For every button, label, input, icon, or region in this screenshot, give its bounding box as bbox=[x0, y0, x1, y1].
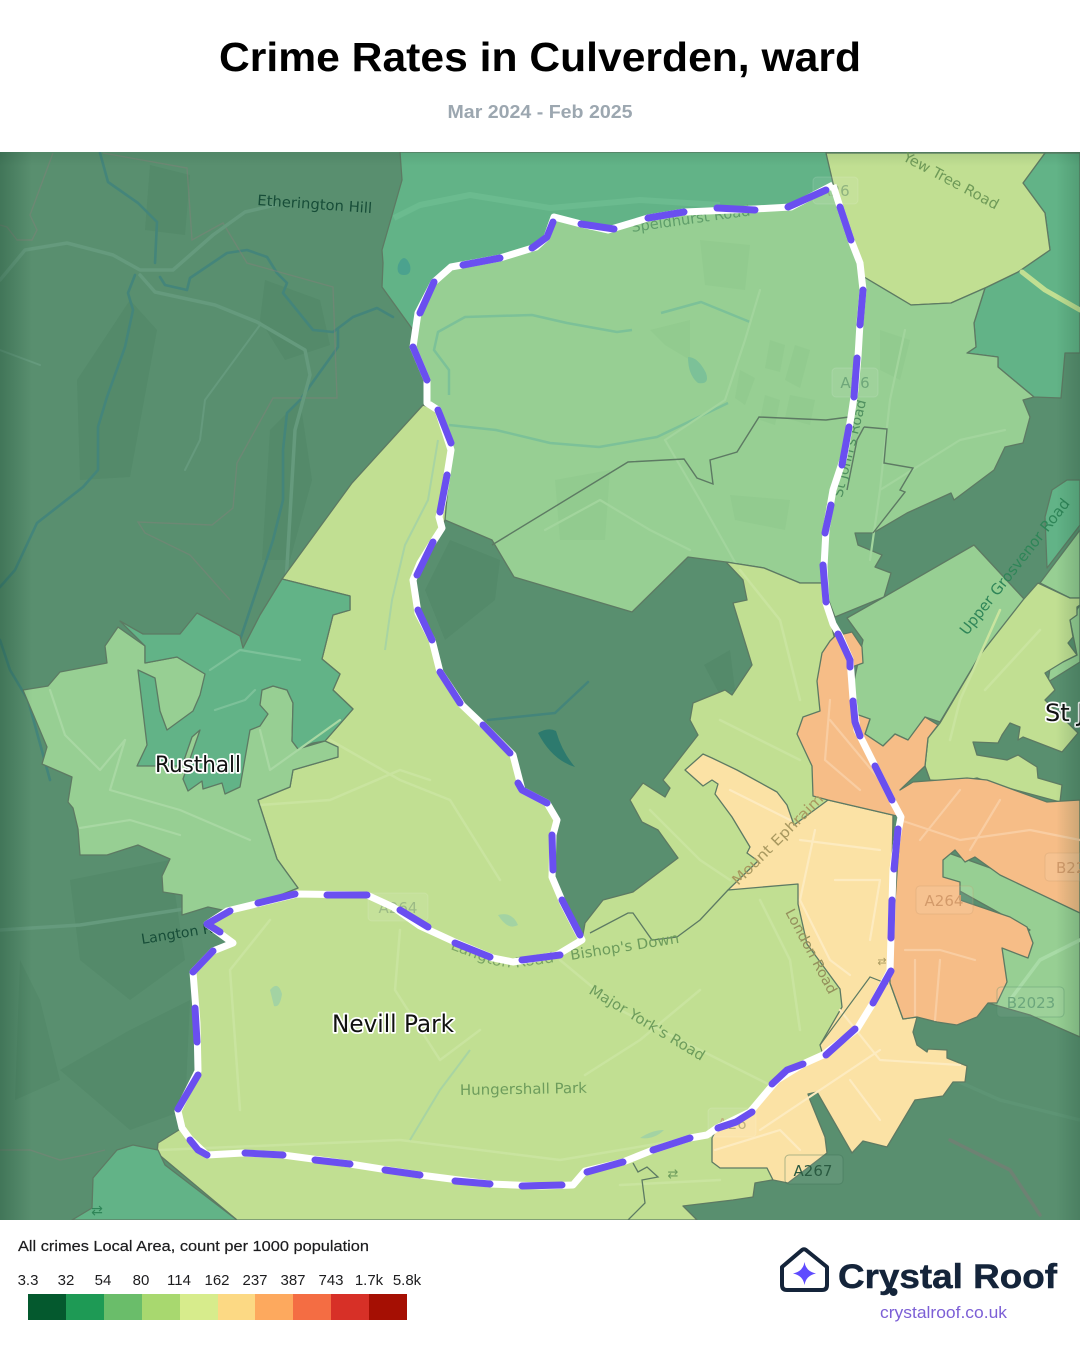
water: pond bbox=[398, 258, 410, 275]
road label: Speldhurst Road: Speldhurst Road bbox=[630, 203, 751, 236]
road label: Major York's Road: Major York's Road bbox=[586, 983, 707, 1064]
logo key detail bbox=[890, 1288, 898, 1296]
legend bbox=[18, 1238, 422, 1320]
road shield: A26 south: A26 bbox=[717, 1115, 747, 1133]
place label: Rusthall: Rusthall bbox=[155, 752, 241, 778]
road label: Bishop's Down: Bishop's Down bbox=[569, 931, 680, 964]
roads on dark area bbox=[0, 205, 1080, 1215]
road shield: A264 east: A264 bbox=[925, 892, 963, 910]
detail: yellow region roads and streams bbox=[160, 440, 1040, 1220]
rivers on dark area bbox=[0, 153, 588, 780]
ward outline: white dashed boundary bbox=[178, 185, 901, 1186]
choropleth map bbox=[0, 152, 1080, 1220]
road shield: A26 central bbox=[832, 368, 878, 397]
legend scale values: 54 bbox=[95, 1272, 111, 1289]
region: yellow-green central and south bbox=[157, 405, 893, 1220]
road shield: A26 north bbox=[813, 177, 858, 204]
road shield: A26 south bbox=[708, 1108, 756, 1137]
region: mid green east strip bbox=[1045, 480, 1080, 568]
road shield: B22 bbox=[1045, 853, 1080, 881]
road shield: A26 central: A26 bbox=[840, 374, 870, 392]
road shield: A267 bbox=[785, 1155, 843, 1184]
legend title: All crimes Local Area, count per 1000 population bbox=[18, 1238, 369, 1255]
region: mid green Rusthall bbox=[120, 579, 353, 794]
legend scale values: 3.3 bbox=[18, 1272, 38, 1289]
cream roads bbox=[715, 790, 960, 1150]
region: yellow-green St Johns bbox=[925, 583, 1080, 802]
boundary lines bbox=[590, 890, 728, 1220]
legend colour bar bbox=[28, 1294, 407, 1320]
subtitle: date range: Mar 2024 - Feb 2025 bbox=[448, 101, 632, 122]
Rusthall roads bbox=[50, 650, 340, 840]
road shield: B2023 bbox=[997, 987, 1064, 1017]
legend scale values: 743 bbox=[318, 1272, 344, 1289]
legend scale values: 80 bbox=[133, 1272, 149, 1289]
road in south-east light green bbox=[1010, 940, 1080, 1000]
region: light green south-east bbox=[940, 850, 1080, 1037]
road label: Etherington Hill: Etherington Hill bbox=[257, 193, 373, 217]
region: mid green north-east bbox=[967, 153, 1080, 398]
road label: Mount Ephraim: Mount Ephraim bbox=[730, 791, 827, 889]
icon: rail station central: ⇄ bbox=[877, 955, 887, 968]
region: light green St Johns south bbox=[847, 545, 1025, 746]
icon: rail station south: ⇄ bbox=[668, 1167, 679, 1182]
road label: Hungershall Park: Hungershall Park bbox=[460, 1081, 588, 1099]
logo wordmark: Crystal Roof bbox=[838, 1258, 1058, 1296]
region: mid green south-west corner bbox=[72, 1145, 237, 1220]
water: lake in dark area bbox=[538, 729, 575, 767]
road label: Langton Road west: Langton R bbox=[140, 921, 214, 948]
title: Crime Rates in Culverden, ward bbox=[219, 34, 861, 80]
cream inner boundary bbox=[820, 977, 888, 1045]
road shield: A264 west bbox=[368, 893, 428, 921]
road: north-east yellow strip bbox=[1022, 272, 1080, 310]
icon: house with star bbox=[782, 1249, 827, 1290]
legend scale values: 5.8k bbox=[393, 1272, 422, 1289]
parish boundary lines bbox=[0, 153, 337, 1160]
website url: crystalroof.co.uk bbox=[880, 1303, 1008, 1322]
region: yellow-green north-east bbox=[826, 153, 1050, 305]
legend scale values: 162 bbox=[204, 1272, 230, 1289]
ward interior detail bbox=[432, 289, 1006, 563]
region: cream town centre bbox=[685, 754, 967, 1183]
road shield: A267: A267 bbox=[794, 1162, 832, 1180]
region: light green Rusthall bbox=[23, 627, 338, 915]
road shield: A264 west: A264 bbox=[379, 899, 417, 917]
legend scale values: 237 bbox=[242, 1272, 268, 1289]
road label: Upper Grosvenor Road: Upper Grosvenor Road bbox=[956, 495, 1074, 638]
road label: St John's Road: St John's Road bbox=[830, 398, 870, 499]
map edge shading bbox=[0, 152, 1080, 1220]
region: light green east patch bbox=[1048, 605, 1080, 682]
region: mid green north-west bbox=[382, 152, 833, 330]
legend scale values: 1.7k bbox=[355, 1272, 384, 1289]
legend scale values: 387 bbox=[280, 1272, 306, 1289]
road label: Yew Tree Road: Yew Tree Road bbox=[899, 149, 1001, 213]
road shield: A26 north: A26 bbox=[820, 182, 850, 200]
region: light green ward north bbox=[413, 185, 1034, 617]
road: north-west mid green band bbox=[394, 195, 720, 218]
road label: London Road: London Road bbox=[781, 906, 840, 997]
region: light green far east bbox=[1040, 530, 1080, 598]
legend scale values: 32 bbox=[58, 1272, 74, 1289]
ward boundary lines inside light green bbox=[492, 417, 913, 545]
legend scale values bbox=[18, 1272, 422, 1289]
road shield: B2023: B2023 bbox=[1007, 994, 1055, 1012]
legend scale values: 114 bbox=[167, 1272, 191, 1289]
terrain patches on dark area bbox=[15, 165, 735, 1130]
region: dark green base bbox=[0, 152, 1080, 1220]
road label: Langton Road east: Langton Road bbox=[452, 946, 553, 968]
place label: Nevill Park: Nevill Park bbox=[332, 1010, 454, 1038]
logo: Crystal Roof bbox=[782, 1249, 1058, 1322]
road shield: A264 east bbox=[916, 886, 973, 914]
icon: rail station High Brooms side: ⇄ bbox=[91, 1203, 103, 1219]
region: orange town centre bbox=[797, 632, 1080, 1025]
orange roads bbox=[825, 700, 1080, 1020]
